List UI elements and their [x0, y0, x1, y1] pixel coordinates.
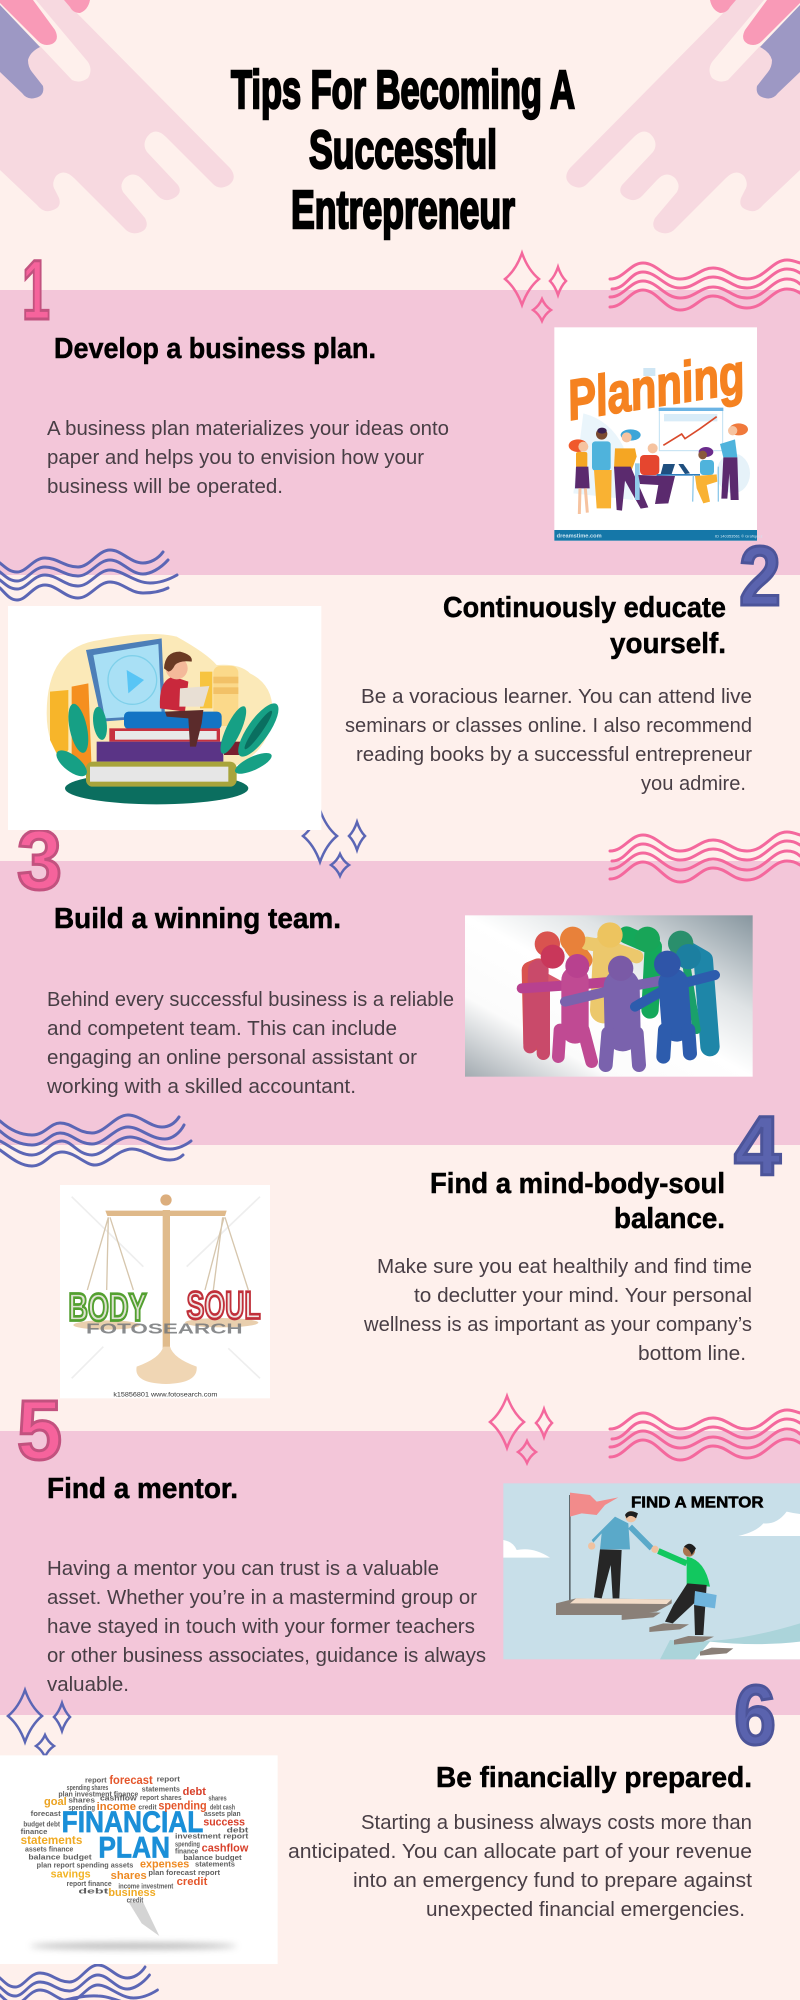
grey filler: income investment [118, 1883, 174, 1890]
text block: tip 5: asset. Whether you’re in a mastermind group or [47, 1587, 477, 1609]
text block: tip 3: and competent team. This can include [47, 1018, 397, 1040]
image: financial plan word cloud: success [203, 1816, 245, 1828]
laptops and table [661, 464, 675, 474]
number 5: 5 [17, 1383, 62, 1477]
mentor figure [592, 1517, 630, 1549]
image: financial plan word cloud: shares [111, 1870, 147, 1882]
text block: tip 5: Having a mentor you can trust is a valuable [47, 1558, 439, 1580]
grey filler: forecast [31, 1811, 61, 1818]
grey filler: balance budget [28, 1854, 92, 1861]
title: Entrepreneur [291, 180, 515, 240]
image: financial plan word cloud: business [108, 1887, 156, 1899]
wave: blue bottom [0, 1965, 158, 2000]
image: financial plan word cloud: savings [51, 1868, 91, 1880]
word body: BODY [68, 1286, 147, 1330]
number 3: 3 [17, 813, 62, 907]
grey filler: assets finance [25, 1847, 73, 1854]
word soul: SOUL [187, 1283, 261, 1327]
text block: tip 2: reading books by a successful entrepreneur [356, 744, 752, 766]
text block: tip 6: Be financially prepared. [436, 1762, 752, 1794]
grey filler: budget debt [23, 1822, 61, 1829]
grey filler: assets plan [204, 1811, 241, 1818]
text block: tip 4: Find a mind-body-soul [430, 1168, 725, 1200]
grey filler: plan forecast report [148, 1870, 221, 1877]
text block: tip 6: Starting a business always costs more than [361, 1812, 752, 1834]
title: Successful [309, 120, 497, 180]
text block: tip 5 [47, 1473, 486, 1696]
text block: tip 2: Continuously educate [443, 592, 726, 624]
person 5 seated [699, 447, 713, 457]
image: find a mentor illustration [503, 1483, 800, 1659]
text block: tip 1: A business plan materializes your ideas onto [47, 418, 449, 440]
image: financial plan word cloud: expenses [140, 1858, 189, 1870]
text block: tip 2: yourself. [610, 628, 726, 660]
grey filler: spending [175, 1842, 200, 1849]
image: financial plan word cloud: debt [183, 1786, 206, 1798]
image: team clay figures [465, 915, 753, 1077]
image: financial plan word cloud: cashflow [202, 1843, 248, 1855]
wave: pink band 3 [610, 832, 800, 882]
caption: FIND A MENTOR [631, 1494, 764, 1511]
text block: tip 1 [47, 333, 449, 498]
person 3 [621, 429, 641, 441]
image: financial plan word cloud [0, 1755, 278, 1964]
text block: tip 3: Behind every successful business is a reliable [47, 989, 454, 1011]
scale frame [105, 1211, 227, 1216]
grey filler: plan report spending assets [37, 1862, 133, 1869]
image: financial plan word cloud: goal [44, 1796, 67, 1808]
person 6 standing [729, 423, 748, 435]
text block: tip 4 [363, 1168, 752, 1365]
grey filler: investment report [175, 1834, 249, 1841]
decorative shapes: top right [566, 0, 800, 233]
wave: blue band 2 [0, 550, 177, 600]
text block: tip 6: into an emergency fund to prepare against [353, 1870, 752, 1892]
icon: blue sparkles 2 [303, 810, 365, 876]
icon: pink sparkles 1 [505, 253, 566, 321]
grey filler: finance [21, 1829, 47, 1836]
text block: tip 5: or other business associates, guidance is always [47, 1645, 486, 1667]
grey filler: debt [78, 1888, 110, 1895]
wave: pink band 1 [610, 260, 800, 310]
grey filler: debt cash [210, 1804, 235, 1811]
image: books learner illustration [8, 606, 321, 830]
text block: tip 3: working with a skilled accountant. [46, 1076, 356, 1098]
text block: tip 1: business will be operated. [47, 476, 283, 498]
text block: tip 5: have stayed in touch with your former teachers [47, 1616, 475, 1638]
grey filler: shares [68, 1798, 95, 1805]
text block: tip 2: Be a voracious learner. You can attend live [361, 686, 752, 708]
text block: tip 4: bottom line. [638, 1343, 746, 1365]
title: Tips For Becoming A [231, 60, 575, 120]
grey filler: report [85, 1778, 107, 1785]
decorative shapes: top left [0, 0, 234, 233]
text block: tip 3: engaging an online personal assistant or [47, 1047, 417, 1069]
text block: tip 4: wellness is as important as your company’s [363, 1314, 752, 1336]
image: financial plan word cloud: PLAN [98, 1831, 170, 1864]
climber figure [658, 1551, 687, 1563]
icon: blue sparkles 4 [8, 1690, 70, 1757]
chains [87, 1217, 248, 1290]
grey filler: report finance [67, 1881, 112, 1888]
text block: tip 1: Develop a business plan. [54, 333, 376, 365]
text block: tip 4: balance. [614, 1203, 725, 1235]
wave: blue band 4 [0, 1115, 191, 1166]
grey filler: debt [227, 1828, 249, 1835]
number 2: 2 [739, 529, 781, 623]
grey filler: balance budget [183, 1855, 242, 1862]
grey filler: finance [175, 1848, 198, 1855]
number 4: 4 [734, 1099, 781, 1193]
text block: tip 2 [345, 592, 752, 795]
number 1: 1 [22, 243, 50, 337]
text block: tip 5: Find a mentor. [47, 1473, 238, 1505]
image: financial plan word cloud: income [97, 1801, 136, 1813]
platform and steps [556, 1598, 672, 1615]
text block: tip 6: unexpected financial emergencies. [426, 1899, 745, 1921]
text block: tip 4: Make sure you eat healthily and find time [377, 1256, 752, 1278]
grey filler: credit [138, 1804, 157, 1811]
number 6: 6 [734, 1668, 776, 1762]
image: scale body and soul [60, 1185, 270, 1399]
image: scale body and soul: k15856801 www.fotosearch.com [113, 1392, 218, 1399]
grey filler: statements [142, 1787, 180, 1794]
image: planning illustration: dreamstime.com [557, 534, 602, 540]
panel: band 3 background [0, 861, 800, 1145]
flag [569, 1495, 571, 1602]
reader [160, 677, 188, 712]
grey filler: spending shares [67, 1785, 108, 1792]
image: planning illustration [554, 327, 762, 541]
panel: band 1 background [0, 290, 800, 575]
grey filler: cashflow [100, 1796, 137, 1803]
grey filler: statements [195, 1862, 235, 1869]
text block: tip 2: you admire. [641, 773, 746, 795]
grey filler [21, 1777, 249, 1905]
wave: pink band 5 [610, 1410, 800, 1460]
title [231, 60, 575, 240]
light background blobs [573, 413, 633, 500]
leaves [52, 698, 285, 781]
pans [73, 1320, 140, 1330]
chart board [659, 408, 723, 451]
front row [522, 970, 715, 1065]
speech tail [128, 1902, 159, 1936]
back row [530, 935, 710, 1047]
text block: tip 3: Build a winning team. [54, 903, 341, 935]
grey filler: credit [127, 1898, 144, 1905]
panel: band 5 background [0, 1431, 800, 1715]
grey filler: report shares [140, 1795, 182, 1802]
grey filler: shares [208, 1796, 227, 1803]
watermark: FOTOSEARCH [86, 1321, 243, 1337]
image: financial plan word cloud: statements [21, 1833, 83, 1847]
icon: pink sparkles 3 [490, 1396, 552, 1463]
text block: tip 5: valuable. [47, 1674, 129, 1696]
text block: tip 4: to declutter your mind. Your personal [414, 1285, 752, 1307]
person 2 [596, 428, 607, 440]
grey filler: plan investment finance [58, 1792, 138, 1799]
image: financial plan word cloud: forecast [109, 1773, 153, 1787]
large words: FINANCIAL [62, 1806, 203, 1839]
person 1 [569, 439, 587, 452]
text block: tip 6 [288, 1762, 752, 1921]
text block: tip 1: paper and helps you to envision how your [47, 447, 424, 469]
text block: tip 6: anticipated. You can allocate part of your revenue [288, 1841, 752, 1863]
text block: tip 3 [46, 903, 454, 1098]
grey filler: spending [68, 1805, 95, 1812]
image: financial plan word cloud: spending [158, 1798, 207, 1812]
image: financial plan word cloud: credit [177, 1876, 208, 1888]
text block: tip 2: seminars or classes online. I also recommend [345, 715, 752, 737]
grey filler: report [157, 1777, 181, 1784]
image: planning illustration: ID 140353561 © Grafiquez [715, 533, 762, 538]
person 4 seated [635, 463, 640, 500]
